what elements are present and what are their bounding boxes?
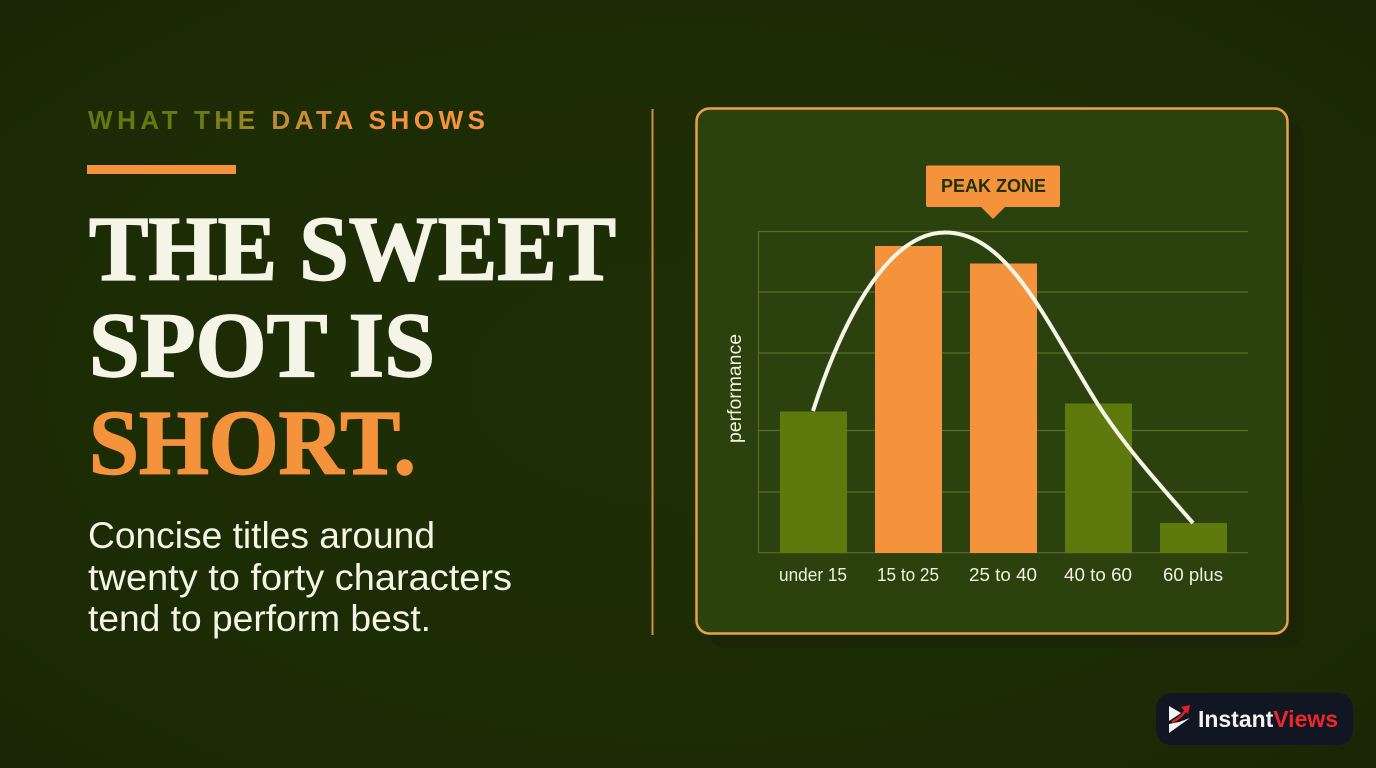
subtitle text [88,515,512,639]
card shadow [710,122,1303,648]
callout: peak zone: PEAK ZONE [941,175,1046,196]
accent rule [87,165,236,174]
y-axis label: performance [725,334,746,443]
logo badge [1156,693,1353,745]
chart grid [758,232,1248,553]
title: THE SWEET [89,197,616,300]
subtitle text: tend to perform best. [88,598,431,639]
vertical divider [652,109,654,635]
logo wordmark: InstantViews [1198,706,1338,732]
title: SPOT IS [89,294,435,396]
bar chart [780,246,1227,553]
eyebrow heading: WHAT THE DATA SHOWS [88,105,485,135]
title [89,197,616,494]
title: SHORT. [89,391,416,494]
x-axis labels: under 15 [779,565,847,585]
panel: chart card [696,108,1303,648]
x-axis labels: 15 to 25 [877,565,939,585]
callout: peak zone [926,166,1060,219]
subtitle text: twenty to forty characters [88,557,512,598]
x-axis labels [779,565,1223,585]
x-axis labels: 40 to 60 [1064,565,1132,585]
subtitle text: Concise titles around [88,515,435,556]
x-axis labels: 25 to 40 [969,565,1037,585]
icon: play arrow with red trend arrow [1169,705,1190,733]
card body [696,108,1288,634]
performance curve [813,232,1193,523]
x-axis labels: 60 plus [1163,565,1223,585]
